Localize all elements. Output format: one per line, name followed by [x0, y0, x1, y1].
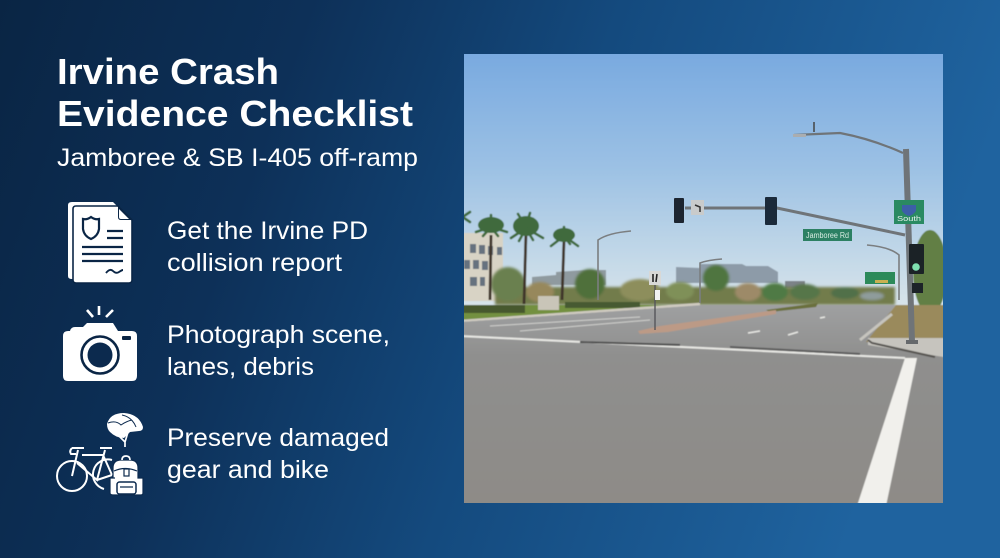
- left office building: [460, 233, 503, 301]
- title: Evidence Checklist: [57, 93, 413, 134]
- pink median: [638, 310, 776, 334]
- right planter: [866, 305, 950, 342]
- text: get the report: [167, 217, 368, 277]
- I-405 south sign: South: [897, 216, 921, 223]
- backpack: [110, 460, 143, 495]
- curb: [860, 314, 892, 340]
- street name sign: [803, 229, 852, 241]
- median sign post: [649, 271, 661, 330]
- left turn sign: [691, 200, 704, 215]
- street name sign: Jamboree Rd: [806, 231, 849, 240]
- text: photograph scene: Photograph scene,: [167, 321, 390, 349]
- title: [57, 51, 413, 134]
- road surface: [460, 305, 950, 510]
- bicycle: [57, 448, 112, 491]
- icon: police report document: [68, 202, 132, 283]
- text: preserve gear: Preserve damaged: [167, 424, 389, 452]
- icon: camera: [63, 306, 137, 381]
- stop line and lane markings: [460, 317, 905, 358]
- signal heads: [674, 197, 924, 293]
- main pole and mast arms: [685, 122, 912, 342]
- photo: intersection at Jamboree and I-405 off-ramp: [460, 50, 950, 510]
- text: get the report: collision report: [167, 249, 342, 277]
- title: Irvine Crash: [57, 51, 279, 92]
- helmet: [107, 413, 143, 438]
- text: preserve gear: [167, 424, 389, 484]
- subtitle: Jamboree & SB I-405 off-ramp: [57, 144, 418, 172]
- lawn and hedge: [464, 295, 666, 320]
- icon: bike, helmet and backpack: [57, 413, 143, 495]
- distant buildings: [532, 264, 805, 288]
- I-405 south sign: [894, 200, 924, 224]
- text: get the report: Get the Irvine PD: [167, 217, 368, 245]
- crosswalk stripe: [857, 358, 917, 506]
- right side trees: [913, 230, 943, 306]
- text: photograph scene: [167, 321, 390, 381]
- right sidewalk: [868, 338, 950, 358]
- palm trees: [464, 212, 578, 304]
- far median: [766, 303, 818, 312]
- street lights in distance: [598, 231, 899, 303]
- text: photograph scene: lanes, debris: [167, 353, 314, 381]
- text: preserve gear: gear and bike: [167, 456, 329, 484]
- tree line: [491, 265, 895, 305]
- green guide sign: [865, 272, 895, 284]
